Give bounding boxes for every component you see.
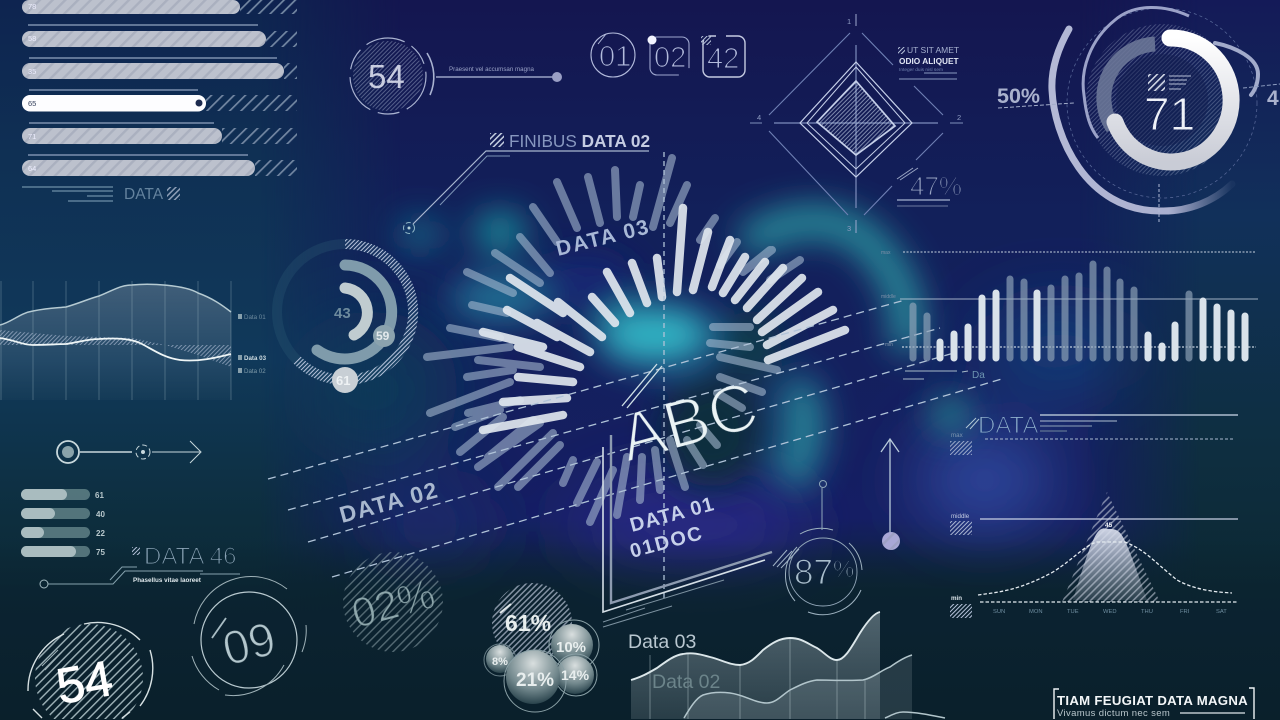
stat: 47%: 47% (910, 171, 962, 201)
panel: top-left progress bars (22, 0, 297, 203)
panel: small progress bars: 22 (96, 529, 105, 538)
bell legend (950, 432, 972, 618)
bar 65 highlighted: 65 (28, 99, 36, 108)
bar 58: 58 (28, 34, 36, 43)
label: Data 01 01DOC: DATA 01 (628, 493, 717, 537)
panel: left line chart (0, 281, 231, 400)
weekday labels: FRI (1180, 609, 1190, 615)
badge: 01 (591, 33, 635, 77)
label: Data 01 01DOC: 01DOC (628, 522, 706, 563)
panel: percentage bubbles (484, 583, 599, 712)
panel: gauge 87% (773, 480, 862, 615)
title box: Vivamus dictum nec sem (1057, 708, 1170, 719)
panel: small progress bars (21, 489, 105, 557)
panel: right bar chart: max (881, 250, 891, 256)
callout: Finibus Data 02 (404, 131, 650, 234)
panel: gauge 02% (343, 552, 443, 652)
weekday labels: SUN (993, 609, 1005, 615)
weekday labels: MON (1029, 609, 1043, 615)
panel: gauge 87%: 87 (794, 553, 833, 592)
panel: circle gauge 54: 54 (368, 58, 405, 95)
radar caption: UT SIT AMET (907, 45, 959, 55)
panel: gauge 87%: % (833, 556, 854, 583)
radar caption: ODIO ALIQUET (899, 56, 959, 66)
dashed guide lines (268, 152, 1005, 598)
panel: radar chart: 3 (847, 224, 851, 233)
badge: 02: 02 (654, 42, 686, 74)
weekday labels (993, 609, 1227, 615)
panel: percentage bubbles: 8% (492, 656, 508, 668)
panel: bell chart (950, 412, 1238, 618)
arrow: timeline (57, 441, 201, 463)
bell legend: max (951, 432, 964, 439)
frame lines (603, 435, 772, 627)
panel: small progress bars: 61 (95, 491, 104, 500)
line chart legend: Data 03 (244, 355, 267, 362)
bar 64: 64 (28, 164, 36, 173)
panel: ring gauge 71 (997, 7, 1280, 224)
title box (1054, 688, 1254, 719)
line chart legend: Data 01 (244, 314, 266, 321)
bubble 21% (504, 650, 566, 712)
bubble 8% (484, 644, 516, 676)
label: Data 01 01DOC (628, 493, 717, 563)
bar 64 (22, 160, 297, 176)
bar 71: 71 (28, 132, 36, 141)
bar 35: 35 (28, 67, 36, 76)
panel: right bar chart: min (885, 342, 893, 348)
burst chart: back rays (427, 158, 800, 522)
radar caption: Integer duis nisl sem (899, 67, 943, 73)
panel: ring gauge 71: 50% (997, 84, 1040, 108)
label: ABC: ABC (611, 367, 766, 476)
bar 78: 78 (28, 2, 36, 11)
label: Data 03: DATA 03 (554, 215, 653, 261)
bar 78 (22, 0, 297, 14)
panel: radar chart: 4 (757, 113, 761, 122)
bell legend: min (951, 595, 962, 602)
bar 58 (22, 31, 297, 47)
panel: gauge 09: 09 (217, 611, 281, 675)
radar caption (898, 45, 959, 79)
badge: 01: 01 (599, 41, 631, 73)
panel: right bar chart (881, 250, 1258, 381)
bars footer label: DATA (124, 186, 164, 203)
panel: percentage bubbles: 14% (561, 667, 590, 683)
callout: Data 46: DATA 46 (144, 543, 236, 570)
panel: right bar chart: Da (972, 370, 985, 381)
panel: bottom area charts: Data 02 (652, 671, 720, 693)
bubble 10% (549, 620, 599, 670)
panel: gauge 54 bottom (28, 622, 153, 719)
line chart legend (238, 314, 267, 375)
panel: radar chart (750, 14, 963, 233)
weekday labels: TUE (1067, 609, 1079, 615)
panel: gauge 09 (192, 577, 306, 696)
weekday labels: SAT (1216, 609, 1227, 615)
bubble 14% (555, 654, 597, 696)
panel: donut 43: 59 (376, 329, 390, 343)
stat: 47% (897, 168, 962, 206)
badge: 42 (701, 36, 745, 77)
panel: right bar chart: middle (881, 294, 896, 300)
panel: small progress bars: 75 (96, 548, 105, 557)
panel: donut 43 (277, 244, 413, 393)
badge: 02 (648, 36, 689, 75)
panel: ring gauge 71: 71 (1144, 88, 1195, 140)
panel: bell chart: DATA (978, 412, 1038, 439)
panel: gauge 54 bottom: 54 (52, 650, 117, 715)
weekday labels: THU (1141, 609, 1153, 615)
panel: donut 43: 61 (336, 373, 350, 388)
bar 71 (22, 128, 297, 144)
callout: Finibus Data 02: FINIBUS DATA 02 (509, 131, 650, 151)
panel: bottom area charts (628, 612, 945, 719)
panel: radar chart: 2 (957, 113, 961, 122)
panel: bell chart: 45 (1105, 522, 1113, 529)
weekday labels: WED (1103, 609, 1117, 615)
bar 65 highlighted (22, 95, 297, 112)
callout: Data 46 (40, 543, 240, 588)
bell legend: middle (951, 513, 970, 520)
burst chart: front rays (483, 208, 845, 430)
title box: TIAM FEUGIAT DATA MAGNA (1057, 693, 1248, 708)
panel: donut 43: 43 (334, 305, 351, 322)
panel: circle gauge 54: Praesent vel accumsan magna (449, 66, 535, 73)
label: Data 02: DATA 02 (337, 476, 441, 528)
callout: Data 46: Phasellus vitae laoreet (133, 577, 202, 584)
panel: percentage bubbles: 10% (556, 639, 586, 656)
panel: percentage bubbles: 61% (505, 610, 551, 636)
panel: radar chart: 1 (847, 17, 851, 26)
arrow: up (881, 439, 900, 550)
panel: circle gauge 54 (350, 38, 562, 114)
line chart legend: Data 02 (244, 368, 266, 375)
bar 35 (22, 63, 297, 79)
bars footer label (22, 186, 180, 203)
panel: percentage bubbles: 21% (516, 670, 554, 691)
panel: small progress bars: 40 (96, 510, 105, 519)
panel: ring gauge 71: 4 (1267, 87, 1279, 110)
badge: 42: 42 (707, 43, 739, 75)
panel: gauge 02%: 02% (346, 570, 440, 637)
panel: bottom area charts: Data 03 (628, 631, 696, 653)
